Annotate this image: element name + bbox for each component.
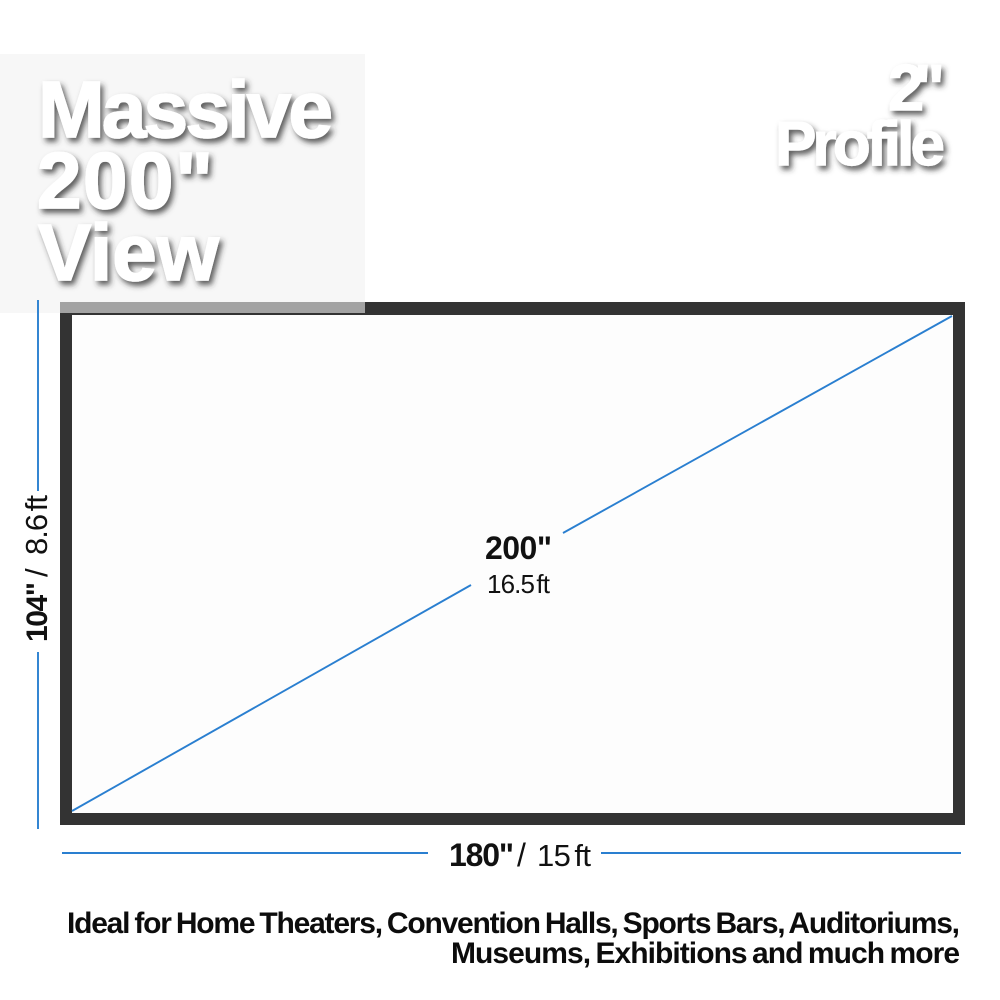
- heading: 2" Profile: [775, 51, 945, 179]
- title: Massive 200" View: [37, 65, 333, 297]
- title: Massive 200" View: 200": [37, 136, 213, 225]
- width measurement line: [62, 852, 961, 854]
- width label: 180" / 15 ft: [449, 837, 591, 873]
- height label: 104" / 8.6 ft: /: [19, 568, 54, 577]
- diagonal label: 200" / 16.5 ft: 200": [485, 530, 552, 566]
- panel: title background: [0, 54, 365, 313]
- screen frame: [60, 302, 965, 825]
- caption: ideal uses: [67, 907, 960, 970]
- title: Massive 200" View: Massive: [38, 65, 333, 154]
- heading: 2" Profile: 2": [888, 51, 945, 124]
- height label: 104" / 8.6 ft: 8.6 ft: [19, 495, 54, 555]
- width label: 180" / 15 ft: 180": [449, 837, 514, 873]
- heading: 2" Profile: Profile: [775, 110, 945, 179]
- caption: ideal uses: Museums, Exhibitions and much more: [451, 937, 960, 970]
- height label: 104" / 8.6 ft: [19, 495, 54, 642]
- height label: 104" / 8.6 ft: 104": [21, 582, 54, 642]
- diagonal label: 200" / 16.5 ft: [485, 530, 552, 599]
- title: Massive 200" View: View: [38, 208, 220, 297]
- height measurement line: [37, 300, 39, 829]
- diagonal label: 200" / 16.5 ft: 16.5 ft: [487, 569, 551, 599]
- width label: 180" / 15 ft: /: [517, 837, 526, 873]
- caption: ideal uses: Ideal for Home Theaters, Convention Halls, Sports Bars, Auditoriums,: [67, 907, 960, 940]
- diagonal measurement line: [72, 316, 952, 811]
- width label: 180" / 15 ft: 15 ft: [537, 838, 591, 873]
